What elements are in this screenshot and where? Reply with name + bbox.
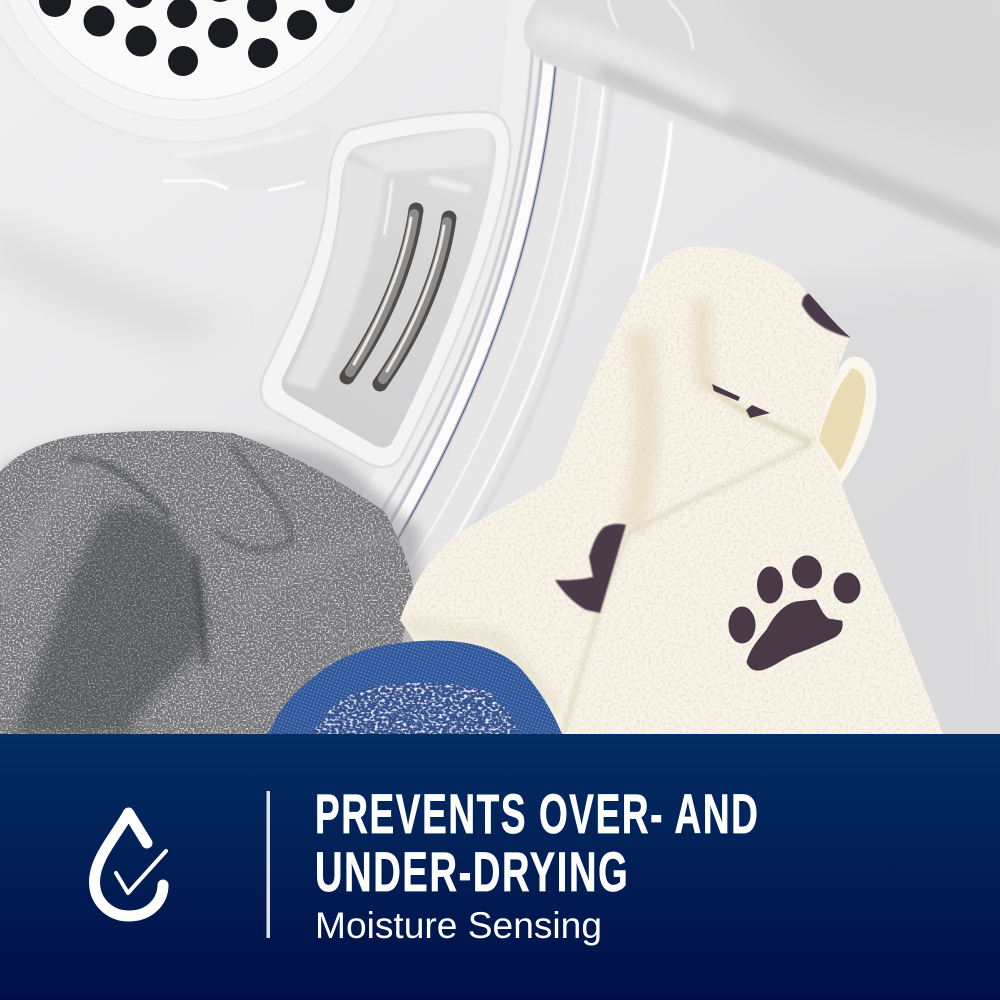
heading — [315, 783, 758, 904]
paw mark: lower-left sliver — [388, 622, 412, 640]
right wall shading — [818, 299, 895, 350]
soft shadow band on left wall — [0, 232, 197, 337]
towel fold shading — [705, 380, 811, 443]
grey t-shirt — [0, 431, 413, 734]
sensor pocket — [261, 112, 510, 467]
subheading: Moisture Sensing — [315, 905, 602, 946]
moisture sensor bar right — [380, 218, 449, 384]
towel binding — [268, 640, 562, 734]
paw mark: folded centre — [555, 524, 626, 613]
terry loops — [312, 683, 518, 734]
cream paw print towel — [388, 246, 943, 734]
heading line 2: UNDER-DRYING — [315, 842, 628, 904]
shadow under laundry — [0, 428, 426, 643]
paw mark: fold fragments — [712, 384, 770, 418]
pocket well — [282, 128, 496, 448]
footer band — [0, 734, 1000, 1000]
raised ridge beside sensor — [162, 179, 305, 192]
dark inner fold — [15, 506, 206, 734]
photo: dryer drum interior — [0, 0, 1000, 734]
drum ring seal — [371, 51, 673, 564]
paw mark: top edge — [802, 293, 852, 338]
moisture sensor bar left — [347, 210, 416, 377]
pocket lit top slope — [355, 128, 488, 172]
drum wall background — [970, 708, 1000, 734]
divider — [266, 791, 270, 938]
exhaust vent dish — [30, 0, 372, 119]
top right pipe baffle — [524, 0, 1000, 254]
towel inner loop — [818, 356, 876, 484]
pocket rim — [261, 112, 510, 467]
towel body — [400, 246, 943, 734]
icon: water drop with check mark — [94, 813, 166, 916]
vent holes — [39, 0, 355, 76]
paw print — [729, 556, 860, 669]
heading line 1: PREVENTS OVER- AND — [315, 783, 758, 846]
blue terry towel — [268, 640, 562, 734]
